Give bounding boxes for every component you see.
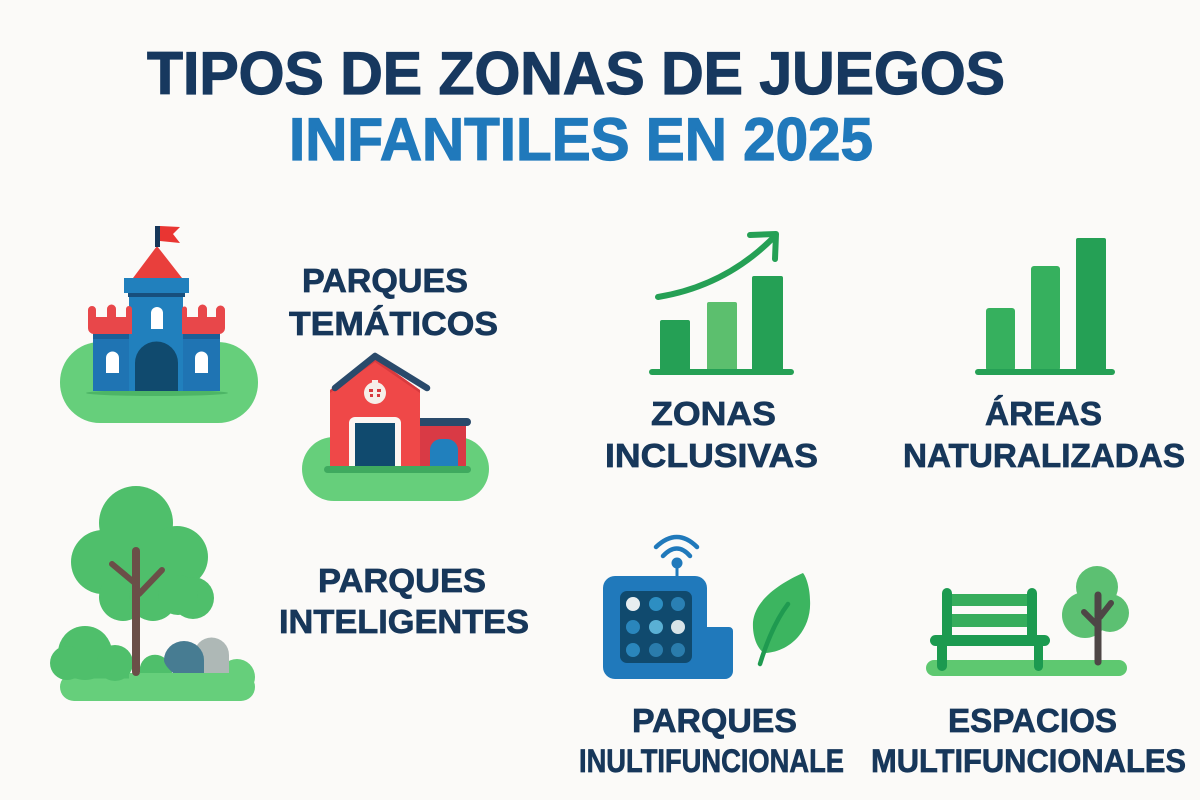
bush — [50, 626, 172, 681]
title line 2: INFANTILES EN 2025 — [289, 106, 873, 173]
label: áreas naturalizadas: NATURALIZADAS — [903, 437, 1185, 474]
battlements — [88, 304, 132, 334]
device screen — [620, 591, 692, 663]
castle lawn — [60, 342, 258, 423]
tree lawn — [219, 659, 255, 695]
icon: castle — [60, 226, 258, 423]
label: áreas naturalizadas: ÁREAS — [985, 395, 1102, 432]
label: parques multifuncionales: INULTIFUNCIONALE — [579, 743, 844, 779]
icon: bar chart — [975, 238, 1115, 375]
tree crown — [71, 486, 214, 621]
bench frame — [930, 588, 1050, 671]
label: parques temáticos: TEMÁTICOS — [289, 305, 498, 342]
icon: tree and rocks — [50, 486, 255, 701]
label: parques inteligentes — [279, 562, 529, 640]
tree trunk — [112, 551, 162, 672]
bench slats — [950, 594, 1030, 606]
label: parques temáticos — [289, 262, 498, 342]
icon: bench and tree — [926, 566, 1129, 676]
device body — [603, 576, 733, 679]
castle flag — [155, 226, 160, 247]
castle roof — [133, 246, 182, 278]
label: zonas inclusivas: INCLUSIVAS — [605, 437, 818, 474]
small tree — [1062, 566, 1129, 638]
label: zonas inclusivas — [605, 395, 818, 474]
label: parques temáticos: PARQUES — [302, 262, 468, 299]
house door — [349, 417, 401, 466]
icon: rising bar chart — [649, 234, 794, 375]
label: parques multifuncionales: PARQUES — [632, 702, 797, 739]
label: zonas inclusivas: ZONAS — [651, 395, 776, 432]
house lawn — [302, 437, 489, 501]
castle windows — [151, 307, 163, 329]
rocks — [194, 638, 229, 673]
label: espacios multifuncionales: MULTIFUNCIONALES — [871, 743, 1186, 779]
house emblem — [364, 380, 386, 404]
house annex — [420, 425, 466, 466]
device antenna — [676, 563, 678, 577]
house body — [330, 358, 420, 466]
label: parques inteligentes: INTELIGENTES — [279, 603, 529, 640]
title — [147, 40, 1005, 173]
icon: leaf — [753, 573, 810, 664]
title line 1: TIPOS DE ZONAS DE JUEGOS — [147, 40, 1005, 107]
label: parques inteligentes: PARQUES — [318, 562, 486, 599]
label: áreas naturalizadas — [903, 395, 1185, 474]
bench ground — [926, 660, 1127, 676]
growth arrow — [658, 234, 776, 297]
house roof — [335, 356, 427, 388]
icon: red house — [302, 356, 489, 501]
label: espacios multifuncionales — [871, 702, 1186, 779]
wifi arcs — [656, 537, 697, 556]
label: parques multifuncionales — [579, 702, 844, 779]
castle door — [135, 342, 178, 391]
icon: smart device — [603, 537, 733, 679]
label: espacios multifuncionales: ESPACIOS — [948, 702, 1117, 739]
